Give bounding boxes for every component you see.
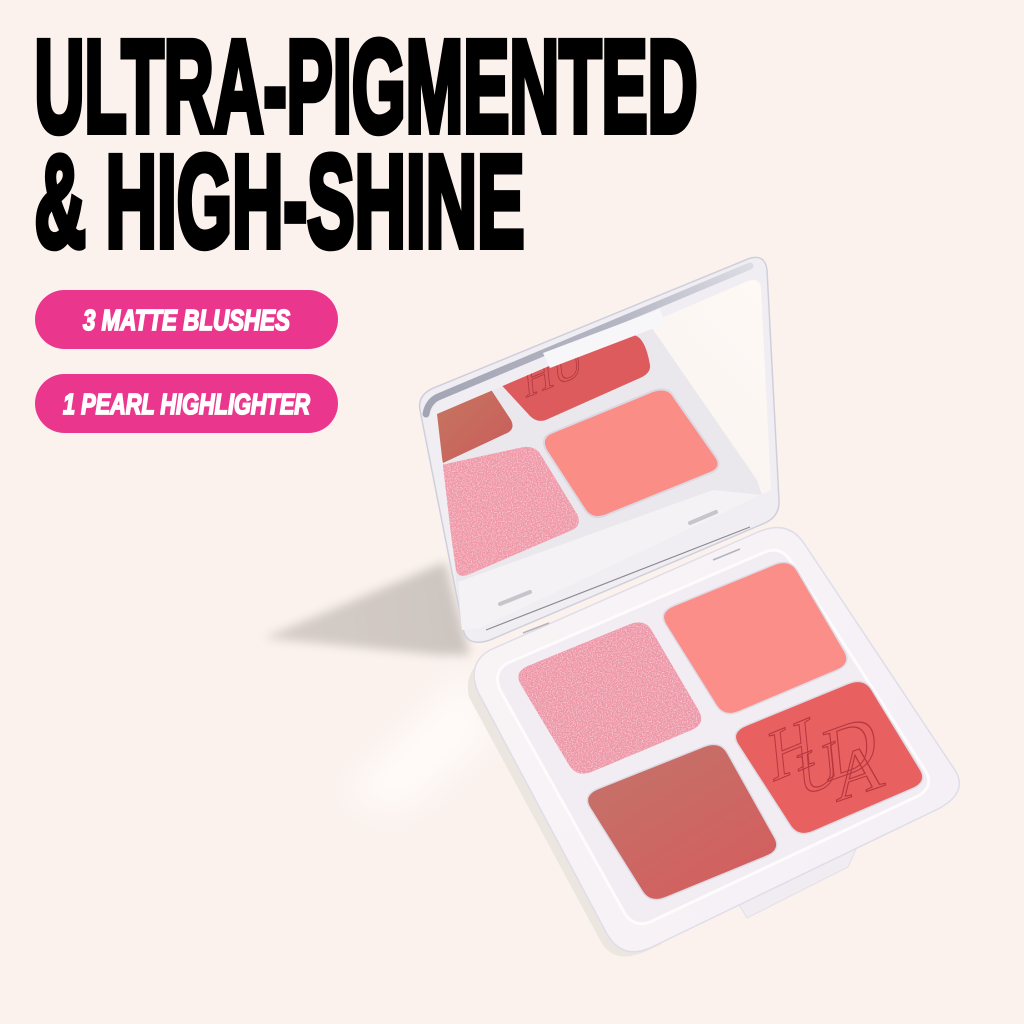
- title: & HIGH-SHINE: [34, 128, 524, 274]
- dark top band of lid: [426, 266, 750, 414]
- base hinge pin right: [713, 549, 740, 560]
- cast shadow of the lid: [264, 562, 470, 655]
- palette base: [468, 527, 959, 956]
- mirror reflection: [430, 328, 762, 632]
- palette lid with mirror: [420, 257, 779, 642]
- reflected logo: HU: [521, 331, 585, 408]
- pill: 3 matte blushes: 3 MATTE BLUSHES: [83, 305, 290, 337]
- base outer shell: [474, 528, 959, 952]
- reflected coral pan: [544, 389, 718, 517]
- mirror surface: [437, 280, 771, 630]
- reflected pearl pan: [441, 447, 579, 576]
- reflected lower lip: [458, 490, 762, 632]
- light glare on the table: [345, 672, 490, 812]
- pill: 1 pearl highlighter: [35, 374, 338, 433]
- lid frame: [420, 257, 779, 642]
- embossed logo: H: [766, 699, 818, 798]
- reflected red pan: [495, 335, 650, 421]
- reflected rust pan: [437, 390, 513, 463]
- pill: 1 pearl highlighter: 1 PEARL HIGHLIGHTER: [63, 389, 310, 421]
- pan: red blush: [735, 681, 923, 834]
- base side wall: [468, 662, 662, 956]
- hinge pin right: [690, 512, 716, 523]
- pill: 3 matte blushes: [35, 290, 338, 349]
- hinge line: [486, 527, 750, 630]
- embossed logo: [766, 697, 888, 817]
- pan: rust blush: [587, 744, 777, 900]
- mirror white tab: [543, 309, 665, 368]
- hinge pin left: [500, 592, 530, 604]
- embossed logo: A: [830, 727, 888, 817]
- pan: coral blush: [663, 562, 847, 714]
- embossed logo: D: [819, 697, 881, 798]
- inner tray: [498, 550, 929, 924]
- base hinge pin left: [523, 623, 549, 633]
- embossed logo: U: [795, 728, 842, 811]
- reflected tray: [443, 329, 762, 608]
- front latch tab: [736, 845, 858, 918]
- title: [34, 12, 698, 274]
- pan: pearl highlighter: [518, 622, 701, 774]
